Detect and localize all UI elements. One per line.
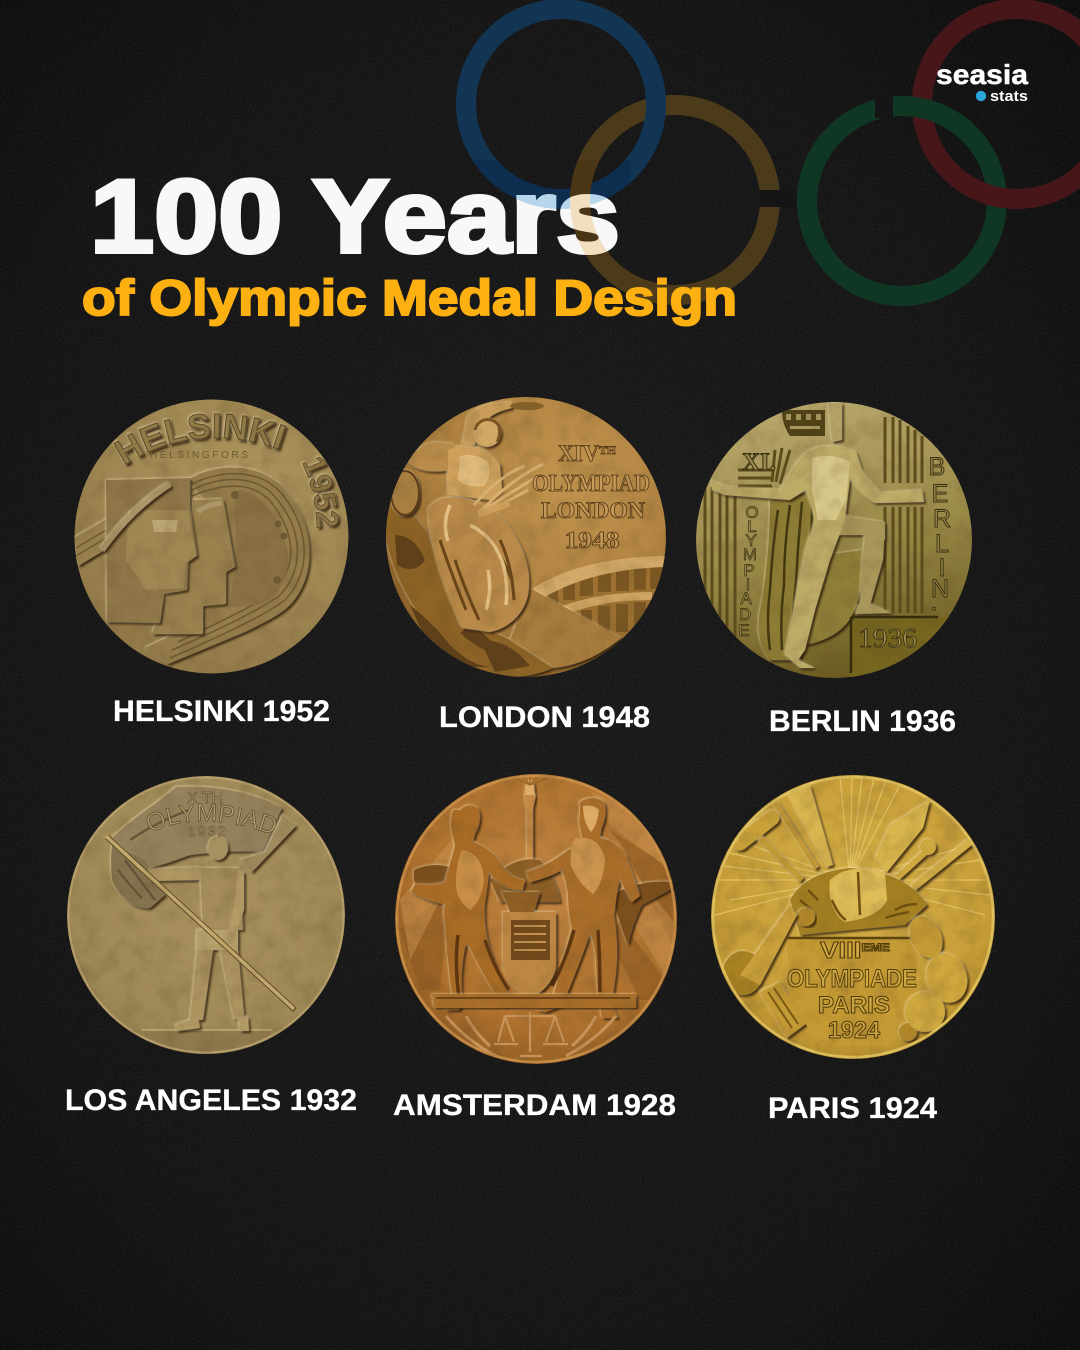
ramp bbox=[510, 588, 621, 668]
small ball bbox=[797, 908, 815, 926]
medal text: VIII bbox=[820, 937, 855, 963]
medal: Berlin 1936: R bbox=[933, 505, 951, 533]
left bat and glove bbox=[723, 905, 807, 1038]
plinth bbox=[432, 994, 636, 1008]
medal: Los Angeles 1932: X TH bbox=[187, 790, 223, 807]
title: 100 Years bbox=[90, 159, 620, 275]
label: Helsinki 1952: HELSINKI 1952 bbox=[113, 695, 330, 728]
plaque top edge bbox=[787, 937, 917, 939]
medal text bbox=[532, 441, 650, 554]
medal: London 1948 bbox=[386, 397, 668, 677]
medal text: XIV bbox=[558, 441, 600, 466]
sun rays bbox=[400, 830, 690, 1000]
tools bbox=[740, 785, 970, 888]
medal text: LONDON bbox=[541, 498, 645, 523]
medal text: HELSINKI bbox=[112, 412, 290, 468]
plaque bbox=[787, 938, 917, 1046]
medal: Los Angeles 1932: 1932 bbox=[188, 823, 227, 839]
medal text: PARIS bbox=[818, 992, 890, 1019]
columns bbox=[705, 417, 922, 650]
helmet mound bbox=[790, 868, 927, 935]
laurel branch bbox=[510, 402, 544, 410]
rock base bbox=[386, 497, 553, 677]
scales bbox=[494, 1012, 568, 1056]
logo: seasia bbox=[936, 59, 1028, 90]
medal: Berlin 1936: I bbox=[746, 575, 750, 594]
medal: Berlin 1936: D bbox=[739, 605, 751, 624]
left figure bbox=[411, 805, 525, 1010]
athlete bbox=[150, 836, 249, 1031]
seated figure bbox=[712, 403, 924, 668]
front head block bbox=[106, 478, 197, 623]
medal: Amsterdam 1928 bbox=[395, 774, 690, 1064]
medal text: OLYMPIAD bbox=[532, 471, 650, 497]
label: London 1948: LONDON 1948 bbox=[439, 701, 650, 734]
medal: Berlin 1936: I bbox=[939, 554, 945, 582]
seat shield bbox=[803, 550, 862, 645]
floor bbox=[851, 617, 938, 673]
medal: Berlin 1936: B bbox=[929, 453, 945, 481]
medal: Berlin 1936: E bbox=[738, 621, 750, 640]
label: Paris 1924: PARIS 1924 bbox=[768, 1092, 937, 1125]
medal text: OLYMPIAD bbox=[146, 803, 276, 833]
crown bbox=[782, 410, 825, 436]
logo bbox=[936, 59, 1028, 105]
medal: Paris 1924 bbox=[711, 775, 995, 1059]
medal text: XI. bbox=[742, 449, 776, 476]
shield with inscription bbox=[502, 892, 556, 998]
medal: Helsinki 1952: HELSINGFORS bbox=[150, 450, 248, 461]
medal patina overlay bbox=[67, 397, 995, 1064]
boxing glove and balls bbox=[899, 911, 973, 1041]
shield bbox=[391, 471, 419, 515]
medal: Berlin 1936: L bbox=[747, 517, 757, 536]
medal: Berlin 1936: N bbox=[931, 575, 949, 603]
medal: Helsinki 1952: 1952 bbox=[301, 455, 342, 532]
laurel bbox=[102, 484, 170, 550]
label: Los Angeles 1932: LOS ANGELES 1932 bbox=[65, 1084, 357, 1117]
medal: Berlin 1936: A bbox=[740, 589, 752, 608]
medal: Berlin 1936: L bbox=[935, 530, 949, 558]
medal text: 1948 bbox=[564, 528, 620, 554]
bottom laurel bbox=[446, 1016, 616, 1056]
medal: Berlin 1936: O bbox=[745, 503, 759, 522]
label: Amsterdam 1928: AMSTERDAM 1928 bbox=[393, 1089, 676, 1122]
flag bbox=[111, 787, 296, 908]
medal: Berlin 1936: Y bbox=[745, 531, 757, 550]
palm frond bbox=[474, 464, 543, 514]
olympic rings bbox=[466, 9, 1080, 296]
logo: stats bbox=[990, 88, 1028, 105]
subtitle: of Olympic Medal Design bbox=[82, 270, 737, 326]
rear face bbox=[152, 499, 235, 634]
victory figure bbox=[408, 402, 529, 632]
ground line bbox=[142, 1029, 272, 1031]
arena bbox=[533, 556, 668, 650]
pole bbox=[107, 837, 295, 1010]
laurel left bbox=[412, 863, 450, 885]
track bbox=[74, 468, 309, 664]
medal: Berlin 1936: 1936 bbox=[858, 623, 917, 653]
logo dot bbox=[976, 91, 986, 101]
stadium infield bbox=[228, 490, 288, 608]
lower dark field bbox=[851, 617, 948, 677]
medal: Berlin 1936: . bbox=[931, 588, 937, 616]
medal: Los Angeles 1932 bbox=[67, 776, 345, 1054]
medal: Helsinki 1952 bbox=[74, 400, 348, 674]
medal text: OLYMPIADE bbox=[787, 965, 917, 993]
medal: Berlin 1936: P bbox=[743, 561, 755, 580]
medal text bbox=[787, 937, 917, 1044]
front face highlight bbox=[126, 510, 196, 590]
medal text: 1924 bbox=[828, 1017, 881, 1044]
medal text: TH bbox=[599, 443, 617, 457]
laurel right bbox=[612, 882, 682, 945]
medal: Berlin 1936: M bbox=[743, 545, 757, 564]
medal: Berlin 1936 bbox=[696, 402, 972, 680]
label: Berlin 1936: BERLIN 1936 bbox=[769, 705, 956, 738]
engraved rays bbox=[712, 776, 990, 915]
torch bbox=[524, 780, 536, 889]
drape bbox=[758, 490, 820, 660]
medal text: EME bbox=[861, 942, 890, 954]
right figure bbox=[526, 798, 640, 1018]
medal: Berlin 1936: E bbox=[932, 480, 948, 508]
